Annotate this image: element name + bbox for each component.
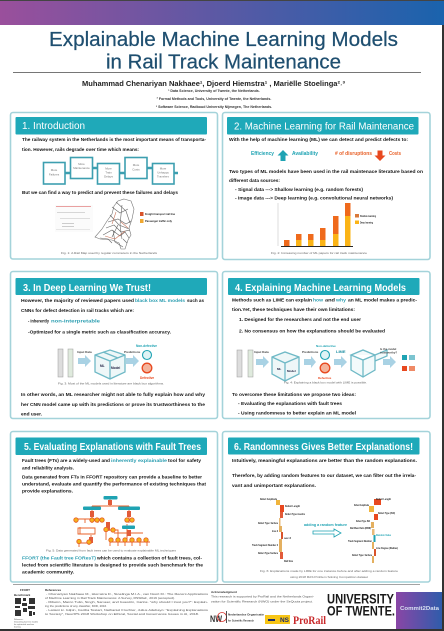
model types text [229, 169, 423, 200]
text block: black box ML models [135, 298, 185, 303]
heading [227, 117, 418, 134]
logo: University of Twente: UNIVERSITY [327, 592, 394, 606]
chart: explanation after adding random feature: Defect Length [376, 497, 391, 501]
icon: black box [95, 350, 125, 379]
basic events [74, 518, 148, 544]
flow diagram of consequences: Train [105, 170, 112, 174]
affiliations: ¹ Data Science, University of Twente, the Netherlands. [168, 89, 260, 93]
intro text [22, 137, 206, 152]
text block: non-interpretable [51, 318, 101, 324]
text block: 2. No consensus on how the explanations should be evaluated [239, 328, 385, 334]
flow diagram of consequences: More [51, 168, 58, 172]
figure: LIME explanation pipeline: Model [287, 369, 296, 373]
panel: 5. Evaluating Explanations with Fault Trees [10, 432, 218, 582]
model types text: different data sources: [229, 178, 280, 183]
text block: - Inherently [28, 318, 49, 324]
title: Explainable Machine Learning Models [49, 28, 398, 51]
text block: However, the majority of reviewed papers used [21, 298, 134, 303]
rail images [58, 349, 73, 377]
icon: non-defective [320, 350, 330, 360]
figure: black box diagram: ML [100, 364, 105, 368]
flow diagram of consequences: More [133, 163, 140, 167]
figure caption [260, 569, 398, 579]
affiliations [156, 89, 272, 109]
affiliations: ³ Software Science, Radboud University Nijmegen, The Netherlands. [156, 105, 272, 109]
chart: explanation before adding random feature: Defect Amplitude [260, 497, 277, 501]
FFORT benchmark QR block [14, 588, 38, 628]
text block: Data generated from FTs in FFORT repository can provide a baseline to better [22, 474, 202, 480]
figure: LIME explanation pipeline: Input Data [254, 350, 269, 354]
FFORT text [22, 556, 203, 574]
FFORT text: FFORT (the Fault tree FOResT) [22, 556, 97, 560]
map legend [140, 212, 176, 223]
figure: LIME explanation pipeline: trustworthy? [380, 350, 397, 354]
FFORT text: which contains a collection of fault trees, col- [96, 556, 202, 560]
map legend: Freight transport rail line [145, 212, 176, 216]
label defective: Defective [140, 376, 154, 380]
figure: black box diagram: Model [111, 366, 120, 370]
map legend: Passenger traffic only [145, 219, 173, 223]
logo: Commit2Data [396, 592, 442, 629]
heading: 2. Machine Learning for Rail Maintenance [234, 122, 414, 132]
chart: explanation after adding random feature: Defect Amplitude [354, 503, 369, 507]
figure caption: Fig. 5: Data generated from fault trees can be used to evaluate explainable ML techniques [46, 548, 177, 552]
figure: LIME explanation pipeline: LIME [336, 349, 346, 354]
chart: explanation before adding random feature: Defect Length [285, 504, 300, 508]
heading: Introduction: 1. Introduction [22, 121, 85, 132]
chart: explanation before adding random feature: Track Segment Number 3 [252, 543, 278, 547]
figure: black box diagram: Input Data [77, 350, 92, 354]
closing text: her CNN model came up with its predictions or prove its trustworthiness to the [21, 402, 205, 407]
icon: up arrow [278, 150, 288, 161]
references: ing the predictions of any classifier, KDD, 2016. [45, 604, 107, 608]
authors: Muhammad Chenariyan Nakhaee¹, Djoerd Hiemstra¹ , Mariëlle Stoelinga²˒³ [82, 81, 346, 88]
chart legend: Shallow learning [360, 214, 376, 218]
affiliations: ² Formal Methods and Tools, University of Twente, the Netherlands. [157, 97, 271, 101]
references: - Latiani H. Gilpin, Cecilia Testart, Nathaniel Fruchter, Julius Adebayo: "Explaining Explanations [46, 608, 209, 612]
top banner [0, 0, 444, 25]
intro text: tion. However, rails degrade over time which means: [22, 147, 139, 152]
benefits row: Efficiency [251, 151, 274, 157]
flow diagram of consequences: More [160, 166, 167, 170]
panel: 2. Machine Learning for Rail Maintenance [222, 112, 430, 260]
figure: LIME explanation pipeline: ML [277, 367, 281, 371]
arrow: adding a random feature [304, 523, 347, 537]
flow diagram of consequences: Costs [132, 168, 140, 172]
flow diagram of consequences: Delays [104, 174, 113, 178]
output chips [402, 355, 415, 371]
heading: Introduction [16, 117, 207, 134]
FFORT text: academic community. [22, 570, 74, 574]
references: to Society", NeurIPS 2018 Workshop on Ethical, Social and Governance Issues in AI, 2018. [45, 612, 199, 616]
text block [22, 458, 206, 494]
icon: defective [320, 363, 330, 373]
text block [232, 298, 418, 334]
text block: and [325, 298, 335, 302]
title: in Rail Track Maintenance [106, 50, 341, 74]
proposals text: - Evaluating the explanations with fault trees [238, 401, 342, 406]
text block: how [313, 298, 323, 302]
acknowledgment: zation for Scientific Research (NWO) under the SeQuoia project. [211, 600, 313, 604]
text block: CNNs for defect detection in rail tracks which are: [21, 308, 134, 313]
heading: 5. Evaluating Explanations with Fault Trees [24, 442, 201, 453]
heading [228, 438, 420, 454]
figure: LIME explanation pipeline: Defective [318, 376, 332, 380]
label non-defective: Non-defective [136, 344, 157, 348]
model types text: - Signal data ---> Shallow learning (e.g. random forests) [235, 187, 363, 192]
text block: and reliability analysis. [22, 466, 74, 470]
model types text: - Image data ---> Deep learning (e.g. convolutional neural networks) [235, 196, 393, 200]
flow diagram of consequences: More [105, 166, 112, 170]
figure caption: using 2018 RAS Problem Solving Competition dataset [290, 575, 368, 579]
figure: LIME explanation pipeline [237, 344, 415, 381]
figure: LIME explanation pipeline: Is the model [380, 347, 397, 351]
text block: tion.Yet, these techniques have their own limitations: [232, 307, 355, 312]
logo: ProRail: ProRail [293, 613, 327, 627]
chart: explanation before adding random feature: Rail Size [284, 559, 293, 563]
chart: explanation before adding random feature: sec 3 [284, 536, 292, 540]
text block: 1. Designed for the researchers and not the end user [239, 317, 361, 322]
text block: Intuitively, meaningful explanations are better than the random explanations. [232, 458, 417, 463]
logo: NWO: for Scientific Research [228, 618, 254, 622]
chart: explanation before adding random feature: Defect Type: Surface [258, 521, 278, 525]
figure caption: Fig. 2: Increasing number of ML papers for rail track maintenance [271, 251, 367, 255]
prediction sentence: But we can find a way to predict and prevent these failures and delays [22, 190, 178, 195]
text block: an ML model makes a predic- [348, 298, 418, 302]
logo: NS [265, 615, 290, 624]
FFORT benchmark QR block: Reference: [14, 618, 24, 621]
FFORT benchmark QR block: Interpreting fault tree models [14, 620, 38, 624]
figure: black box diagram [58, 344, 157, 380]
FFORT benchmark QR block: learning [14, 626, 21, 628]
icon: down arrow [374, 150, 386, 161]
icon: defective [142, 363, 152, 373]
figure: fault tree [74, 496, 150, 547]
logo: University of Twente: OF TWENTE. [327, 604, 395, 618]
OR gates [89, 500, 131, 543]
chart: explanation after adding random feature: Line Degree (Radius) [376, 546, 398, 550]
figure: black box diagram: Predictions [124, 350, 141, 354]
heading: 4. Explaining Machine Learning Models [235, 283, 406, 294]
acknowledgment: This research is supported by ProRail and the Netherlands Organi- [211, 594, 314, 598]
references: of Machine Learning in Rail Track Maintenance: A Survey, RSSRail , 2019 (accepted). [45, 596, 175, 600]
chart legend [355, 214, 376, 224]
text block: why [335, 298, 346, 302]
acknowledgment: Acknowledgment [211, 590, 237, 594]
figure: LIME explanation pipeline: Predictions [302, 350, 319, 354]
heading: 3. In Deep Learning We Trust! [23, 283, 151, 294]
chart: explanation before adding random feature: Defect Type insulAs [285, 512, 305, 516]
references: - Ribeiro, Marco Tulio, Singh, Sameer, and Guestrin, Carlos. "why should I trust you?": Explain- [46, 600, 208, 604]
chart legend: Deep learning [360, 220, 373, 224]
figure: LIME explanation pipeline: Non-defective [316, 344, 336, 348]
title [49, 28, 398, 74]
logo: NS: NS [280, 618, 289, 624]
icon: open box [351, 350, 387, 377]
icon: QR code [15, 598, 35, 616]
benefits row: # of disruptions [335, 151, 372, 157]
chart: explanation after adding random feature: Defect Type: Surface [352, 553, 372, 557]
logo: NWO [210, 611, 264, 624]
chart: explanation after adding random feature: Defect Type (ISO) [378, 511, 395, 515]
arrow [126, 355, 139, 367]
text block: vant and unimportant explanations. [232, 483, 316, 488]
icon: rail map of the Netherlands [95, 199, 134, 249]
text block: Therefore, by adding random features to our dataset, we can filter out the irrela- [232, 473, 416, 478]
flow diagram of consequences: Maintenance [73, 166, 90, 170]
logo: University of Twente [327, 592, 395, 618]
benefits row: Costs [389, 151, 401, 157]
proposals text: To overcome these limitations we propose two ideas: [232, 392, 356, 397]
FFORT benchmark QR block: FFORT [20, 588, 30, 592]
text block: Methods such as LIME can explain [232, 298, 312, 302]
heading [228, 278, 420, 295]
heading [16, 438, 207, 455]
references: - Chenariyan Nakhaee M., Hiemstra D., Stoelinga M.I.A., van Noort M.: The Recent Applications [46, 592, 209, 596]
panel: 4. Explaining Machine Learning Models [222, 272, 430, 418]
intro text: The railway system in the Netherlands is the most important means of transporta- [22, 137, 206, 142]
panel: 6. Randomness Gives Better Explanations [222, 432, 430, 582]
panel: 3. In Deep Learning We Trust [10, 272, 218, 418]
figure caption: Fig. 4: Explaining a black box model with LIME is possible. [284, 380, 367, 384]
text block: Fault trees (FTs) are a widely-used and [22, 458, 110, 463]
arrow: adding a random feature: adding a random feature [304, 523, 347, 527]
text block: -Optimized for a single metric such as classification accuracy. [28, 330, 171, 334]
flow diagram of consequences: Failures [49, 172, 60, 176]
logo: NWO: Nederlandse Organisatie [228, 612, 264, 616]
chart: explanation after adding random feature: Rail Wear Ratio (RWR) [350, 526, 371, 530]
flow diagram of consequences: Unhappy [157, 170, 169, 174]
rail images [237, 350, 253, 377]
chart: explanation before adding random feature: Insu 2 [272, 529, 278, 533]
figure caption: Fig. 3: Most of the ML models used in literature are black box algorithms. [58, 382, 164, 386]
text block [21, 298, 204, 334]
heading: 6. Randomness Gives Better Explanations! [234, 442, 413, 453]
logo: NWO: NW [210, 614, 222, 624]
text block: understand, evaluate and quantify the performance of existing techniques that [22, 482, 206, 486]
icon: non-defective [142, 350, 152, 360]
FFORT benchmark QR block: for explainable machine [14, 623, 34, 626]
flow diagram of consequences: More [78, 162, 85, 166]
panel: 1. Introduction [10, 112, 218, 259]
flow diagram of consequences: Travelers [157, 174, 170, 178]
closing text: end user. [21, 412, 42, 416]
benefits row [251, 150, 401, 161]
text block: inherently explainable [111, 458, 167, 463]
chart: explanation after adding random feature: Defect Type ISO [356, 519, 370, 523]
references [45, 588, 209, 616]
proposals text [232, 392, 356, 416]
heading [16, 278, 207, 295]
tree gate labels [83, 496, 140, 529]
figure: screenshot [55, 205, 93, 232]
flow diagram of consequences [44, 158, 178, 184]
FFORT benchmark QR block: Benchmark [14, 593, 31, 597]
closing text [21, 392, 205, 416]
arrow [78, 355, 91, 367]
proposals text: - Using randomness to better explain an ML model [238, 410, 356, 416]
references: References [45, 588, 62, 592]
closing text: In other words, an ML researcher might not able to fully explain how and why [21, 392, 205, 397]
chart: explanation before adding random feature: Defect Type Surface [258, 551, 278, 555]
acknowledgment [211, 590, 314, 604]
text block: provide explanations. [22, 488, 73, 494]
text block: tool for safety [168, 458, 201, 463]
model types text: Two types of ML models have been used in the rail maintenace literature based on [229, 169, 423, 174]
chart: explanation after adding random feature [348, 497, 398, 563]
chart: explanation after adding random feature: Track Segment Number [348, 539, 372, 543]
figure caption: Fig. 6: Explanations made by LIME for one instance before and after adding a random feature [260, 569, 398, 573]
figure caption: Fig. 1: A Rail Map used by regular commuters in the Netherlands [61, 251, 158, 255]
logo: Commit2Data: Commit2Data [400, 606, 440, 612]
bar chart: ML papers per year [278, 203, 376, 247]
chart: explanation after adding random feature: Random Value [376, 533, 391, 537]
icon: black box [272, 352, 299, 381]
text block: such as [187, 298, 204, 303]
benefits row: Availability [292, 151, 318, 157]
chart: explanation before adding random feature [252, 497, 305, 563]
FFORT text: lected from scientific literature is designed to provide such benchmark for the [22, 562, 203, 568]
intro sentence: With the help of machine learning (ML) we can detect and predict defects to: [229, 137, 409, 142]
text block [232, 458, 417, 488]
